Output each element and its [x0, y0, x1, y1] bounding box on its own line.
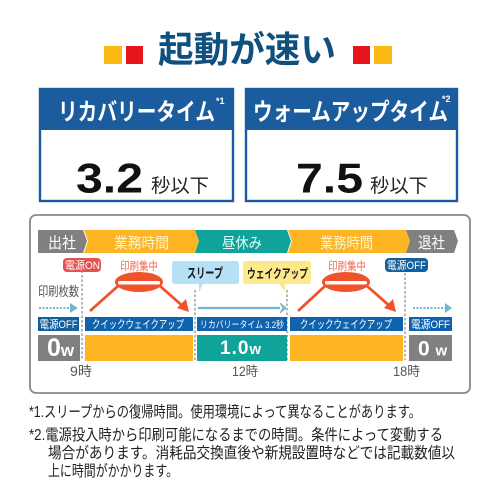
footnote 2 — [29, 426, 455, 480]
footnote 2: *2.電源投入時から印刷可能になるまでの時間。条件によって変動する — [29, 426, 443, 444]
arrow: idle before start — [39, 303, 78, 313]
title with decorative squares — [104, 29, 392, 70]
afternoon printing peak: 印刷集中 — [328, 259, 366, 273]
footnote 2: 上に時間がかかります。 — [48, 462, 178, 480]
time axis labels: 12時 — [232, 364, 258, 379]
panel: daily power timeline — [30, 215, 470, 393]
morning printing peak — [90, 259, 189, 312]
power consumption bars: 0 w — [418, 338, 448, 360]
power consumption bars: 0w — [47, 334, 75, 362]
timeline header bar: 業務時間 — [114, 235, 169, 252]
time axis labels: 9時 — [70, 364, 93, 379]
time axis labels: 18時 — [393, 364, 420, 379]
heading: recovery time: リカバリータイム — [58, 99, 215, 126]
timeline header bar: 出社 — [48, 234, 76, 252]
arrow: idle after finish — [413, 303, 452, 313]
callout: wake up — [243, 261, 311, 291]
power on label: 電源ON — [65, 258, 100, 272]
unit: seconds or less: 秒以下 — [151, 175, 209, 197]
dashed time markers — [82, 266, 405, 360]
status row: 電源OFF — [40, 317, 78, 331]
timeline header bar: 退社 — [418, 234, 445, 252]
value: 3.2 seconds: 3.2 — [76, 154, 143, 202]
footnote mark 1: *1 — [216, 96, 225, 106]
unit: seconds or less: 秒以下 — [370, 175, 428, 197]
morning printing peak: 印刷集中 — [120, 259, 158, 273]
power consumption bars: 1.0w — [220, 338, 262, 359]
heading: warm-up time: ウォームアップタイム — [253, 99, 448, 126]
timeline header bar: 業務時間 — [320, 235, 373, 252]
panel: warm-up time — [245, 88, 458, 202]
callout: sleep — [172, 261, 239, 292]
status row: 電源OFF — [411, 317, 450, 331]
callout: wake up: ウェイクアップ — [247, 267, 308, 281]
footnote mark 2: *2 — [442, 94, 451, 104]
power consumption bars — [38, 334, 452, 362]
title with decorative squares: 起動が速い — [158, 29, 336, 70]
status row: クイックウェイクアップ — [300, 318, 392, 331]
footnotes — [29, 403, 455, 480]
panel: recovery time — [39, 88, 234, 202]
callout: sleep: スリープ — [187, 266, 223, 281]
timeline header bar — [38, 230, 458, 253]
timeline header bar: 昼休み — [222, 235, 262, 252]
footnote 2: 場合があります。消耗品交換直後や新規設置時などでは記載数値以 — [48, 444, 455, 462]
time axis labels — [70, 364, 420, 379]
status row: リカバリータイム 3.2秒 — [200, 319, 284, 331]
left label: pages printed: 印刷枚数 — [38, 284, 79, 299]
arrow: low power during lunch — [198, 303, 286, 313]
status row: クイックウェイクアップ — [92, 318, 184, 331]
status row — [38, 317, 452, 331]
afternoon printing peak — [298, 259, 396, 312]
power off label: 電源OFF — [387, 258, 426, 272]
value: 7.5 seconds: 7.5 — [296, 154, 363, 202]
